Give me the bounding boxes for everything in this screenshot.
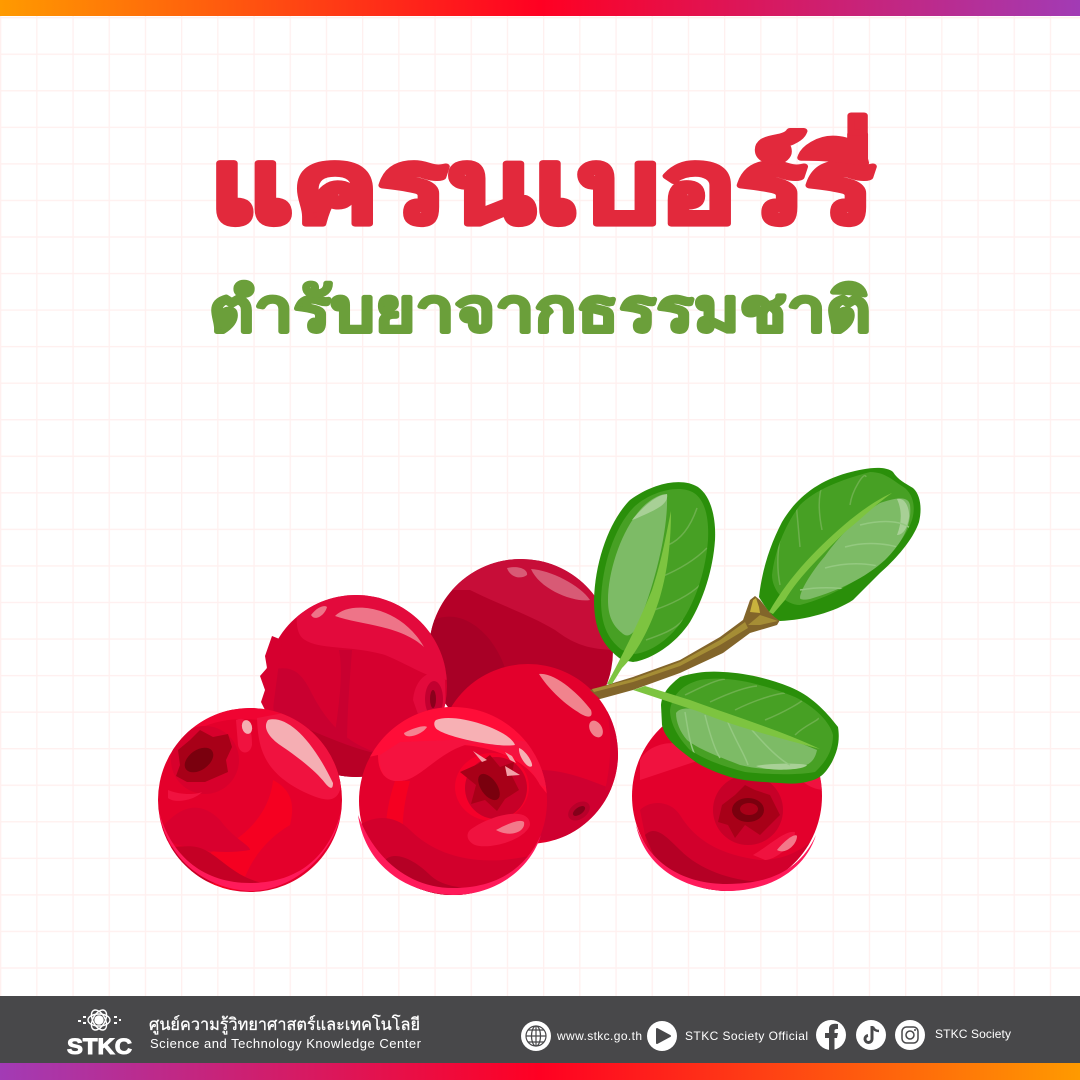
berry: back top [430, 559, 613, 708]
berry: left middle [266, 595, 447, 777]
leaf: lower [633, 672, 839, 784]
organisation name English: Science and Technology Knowledge Center [150, 1036, 422, 1051]
leaf: top right [759, 468, 921, 621]
website text: www.stkc.go.th [556, 1029, 642, 1043]
berry: front middle [355, 705, 555, 900]
bottom gradient bar [0, 1063, 1080, 1080]
footer band [0, 996, 1080, 1063]
logo wordmark: STKC [67, 1034, 132, 1059]
icon: play [647, 1021, 677, 1051]
berry 6 bottom rim [636, 825, 816, 891]
berry: left calyx bumps [260, 636, 282, 716]
berry: right middle [451, 664, 618, 844]
icon: tiktok [856, 1020, 886, 1050]
subtitle: ตำรับยาจากธรรมชาติ [209, 277, 871, 344]
berry 5 bottom rim [358, 815, 541, 895]
title: แครนเบอร์รี่ [210, 115, 874, 244]
social text: STKC Society [935, 1027, 1011, 1041]
berry 4 bottom rim [159, 812, 341, 891]
icon: instagram [895, 1020, 925, 1050]
berry: right [632, 726, 822, 891]
illustration: cranberries with leaves [155, 468, 921, 900]
logo: STKC atom mark [78, 1007, 121, 1033]
youtube text: STKC Society Official [685, 1029, 808, 1043]
top gradient bar [0, 0, 1080, 16]
berry: front left [155, 705, 345, 895]
icon: facebook [816, 1020, 846, 1050]
icon: globe [521, 1021, 551, 1051]
stem [590, 596, 780, 699]
leaf: top left [594, 482, 715, 684]
organisation name Thai: ศูนย์ความรู้วิทยาศาสตร์และเทคโนโลยี [149, 1014, 420, 1035]
